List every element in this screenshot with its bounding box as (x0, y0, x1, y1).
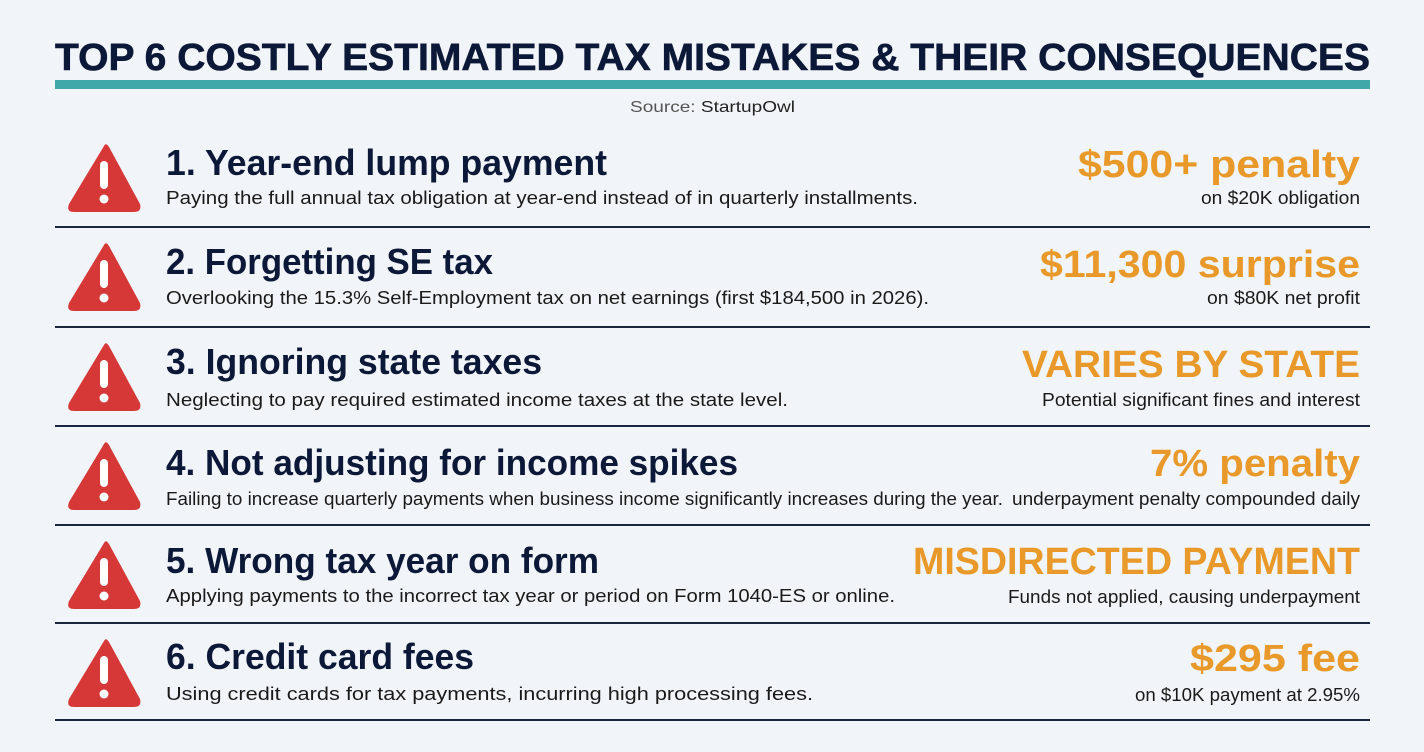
row 5 (68, 540, 1360, 609)
value: $500+ penalty (1078, 144, 1360, 186)
description: Paying the full annual tax obligation at year-end instead of in quarterly installments. (166, 188, 918, 208)
value: $11,300 surprise (1040, 244, 1360, 286)
row 2 (68, 241, 1360, 311)
value: $295 fee (1190, 638, 1360, 680)
row 3 (68, 341, 1360, 411)
value note: on $10K payment at 2.95% (1135, 685, 1360, 705)
value: VARIES BY STATE (1022, 344, 1360, 386)
description: Using credit cards for tax payments, incurring high processing fees. (166, 684, 813, 704)
heading: 5. Wrong tax year on form (166, 540, 599, 581)
icon: warning triangle (68, 343, 140, 411)
icon: warning triangle (68, 144, 140, 212)
value: 7% penalty (1150, 443, 1360, 485)
description: Failing to increase quarterly payments when business income significantly increases during the year. (166, 489, 1003, 509)
icon: warning triangle (68, 243, 140, 311)
heading: 1. Year-end lump payment (166, 142, 607, 183)
heading: 2. Forgetting SE tax (166, 241, 493, 282)
value: MISDIRECTED PAYMENT (913, 541, 1360, 583)
value note: on $80K net profit (1207, 288, 1360, 308)
title: TOP 6 COSTLY ESTIMATED TAX MISTAKES & THEIR CONSEQUENCES (55, 37, 1370, 79)
icon: warning triangle (68, 442, 140, 510)
row 4 (68, 442, 1360, 510)
value note: Potential significant fines and interest (1042, 390, 1360, 410)
source: Source: StartupOwl (630, 99, 795, 116)
value note: on $20K obligation (1201, 188, 1360, 208)
heading: 6. Credit card fees (166, 636, 474, 677)
value note: underpayment penalty compounded daily (1012, 489, 1360, 509)
heading: 4. Not adjusting for income spikes (166, 442, 738, 483)
description: Overlooking the 15.3% Self-Employment tax on net earnings (first $184,500 in 2026). (166, 288, 929, 308)
icon: warning triangle (68, 541, 140, 609)
icon: warning triangle (68, 639, 140, 707)
value note: Funds not applied, causing underpayment (1008, 587, 1360, 607)
description: Applying payments to the incorrect tax year or period on Form 1040-ES or online. (166, 586, 895, 606)
row 1 (68, 142, 1360, 212)
heading: 3. Ignoring state taxes (166, 341, 542, 382)
row 6 (68, 636, 1360, 707)
description: Neglecting to pay required estimated income taxes at the state level. (166, 390, 788, 410)
